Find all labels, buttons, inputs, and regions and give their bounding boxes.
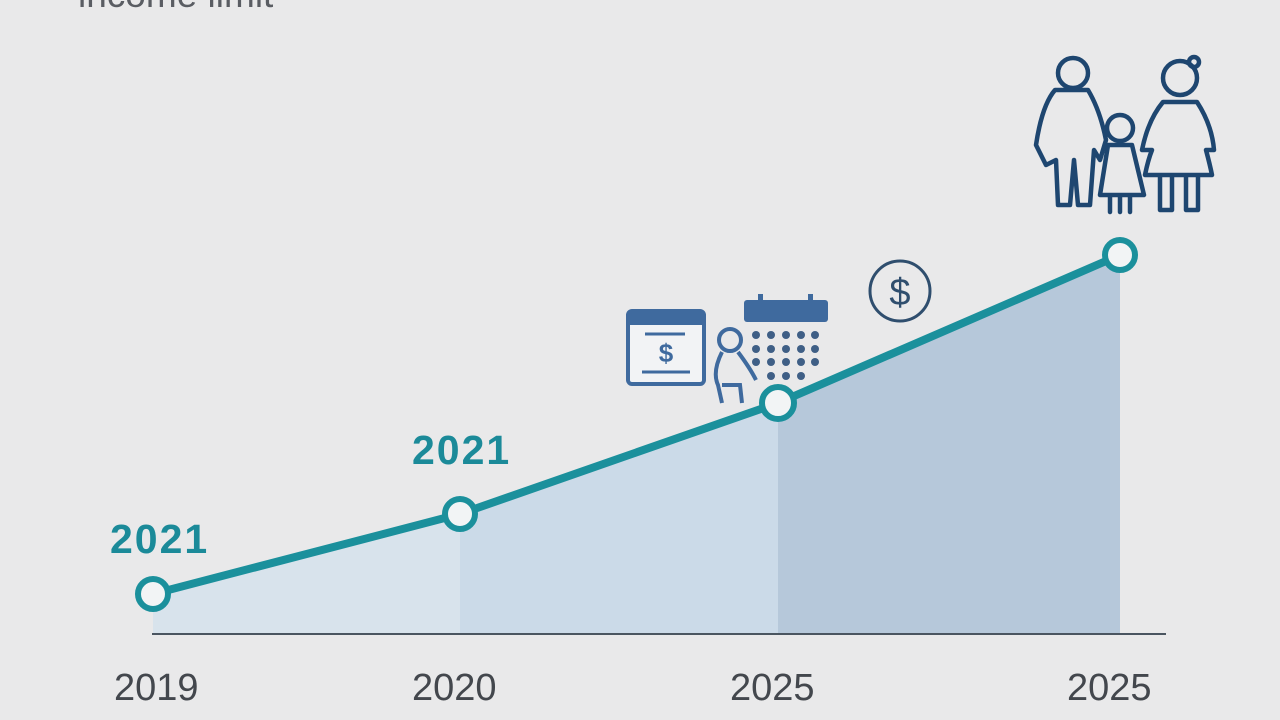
area segment 2 xyxy=(460,403,778,634)
icon: dollar coin: $ xyxy=(889,272,911,314)
trend line xyxy=(153,255,1120,594)
icon: dollar form: $ xyxy=(659,338,674,368)
axis labels: 2025 xyxy=(730,667,815,709)
icon: calendar xyxy=(744,294,828,380)
icon: dollar coin xyxy=(870,261,930,321)
point labels xyxy=(110,427,511,562)
axis baseline xyxy=(152,633,1166,635)
point labels: 2021 xyxy=(110,516,209,562)
data points xyxy=(138,240,1135,609)
axis labels: 2025 xyxy=(1067,667,1152,709)
axis labels: 2019 xyxy=(114,667,199,709)
axis labels xyxy=(114,667,1152,709)
icon: family xyxy=(1036,57,1214,212)
icon: dollar form xyxy=(628,311,704,384)
axis labels: 2020 xyxy=(412,667,497,709)
area segment 1 xyxy=(153,514,460,634)
icon: person xyxy=(716,329,756,403)
area segment 3 xyxy=(778,255,1120,634)
point labels: 2021 xyxy=(412,427,511,473)
